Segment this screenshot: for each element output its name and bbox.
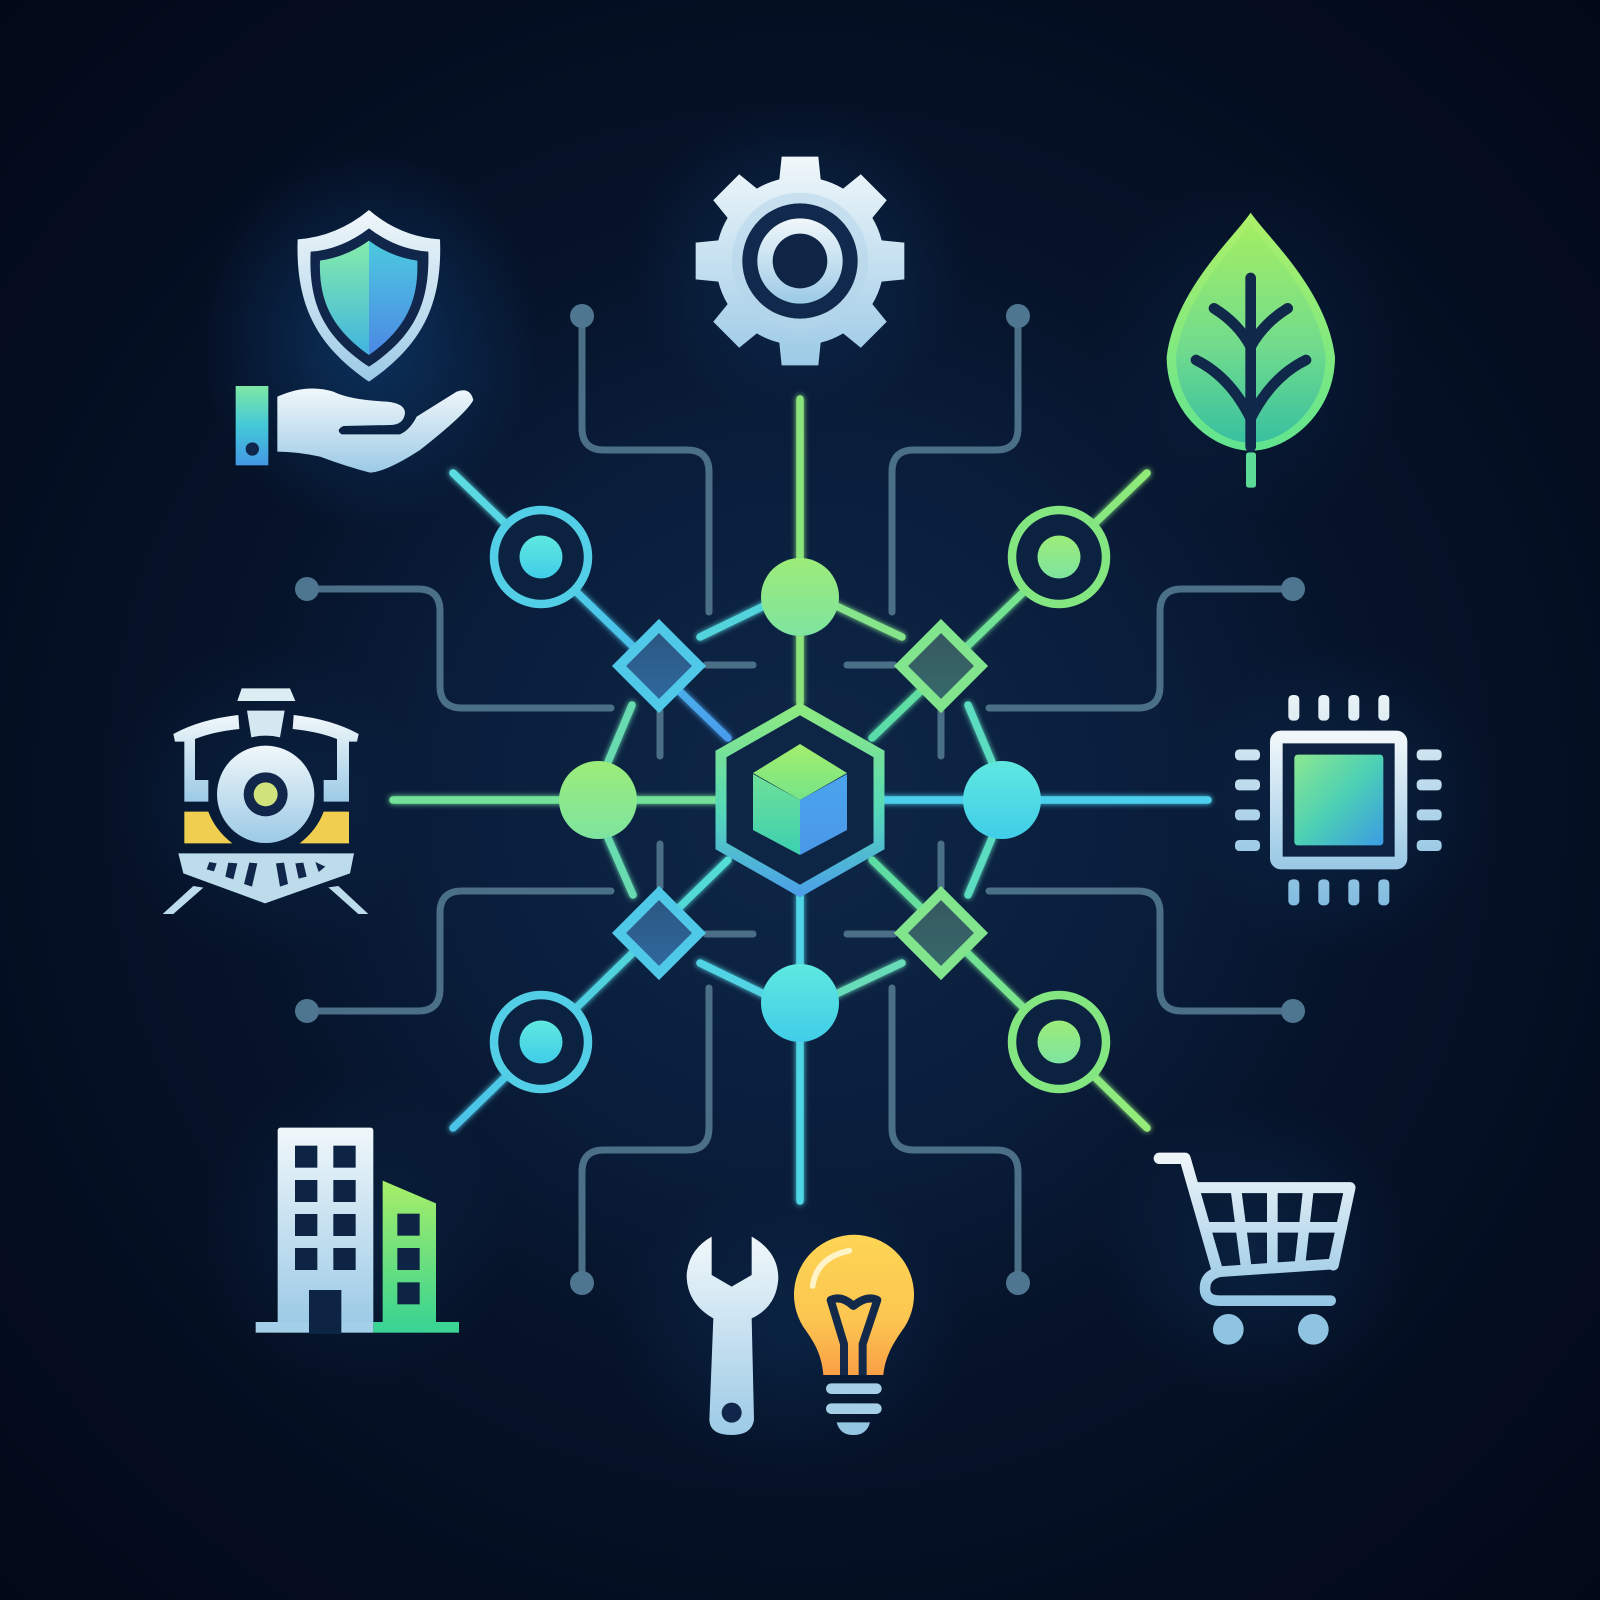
hand (277, 388, 473, 473)
ring node: top left (494, 510, 588, 604)
central hexagon hub (721, 709, 879, 891)
ring node: top right (1012, 510, 1106, 604)
icon: shopping cart (1159, 1158, 1350, 1345)
hub connectors (393, 399, 1208, 1201)
icon: train (163, 688, 368, 914)
hand cuff (236, 386, 268, 465)
icon: light bulb (794, 1235, 914, 1435)
cube (753, 744, 847, 855)
diamond: top left (619, 626, 699, 706)
node: bottom (761, 964, 839, 1042)
node: top (761, 558, 839, 636)
diamond: top right (901, 626, 981, 706)
icon: gear (696, 157, 904, 365)
trace end dots (295, 304, 1305, 1295)
icon: leaf (1167, 213, 1335, 488)
node: left (559, 761, 637, 839)
icon: buildings (256, 1128, 459, 1334)
icon glows (105, 100, 1500, 1480)
ring node: bottom left (494, 995, 588, 1089)
icon: microchip (1235, 695, 1442, 905)
ring node: bottom right (1012, 995, 1106, 1089)
icon: wrench (687, 1237, 778, 1435)
node: right (963, 761, 1041, 839)
circuit traces (306, 316, 1293, 1283)
shield (298, 210, 440, 382)
icon: shield and hand (236, 210, 473, 473)
diamond: bottom left (619, 893, 699, 973)
diamond: bottom right (901, 893, 981, 973)
